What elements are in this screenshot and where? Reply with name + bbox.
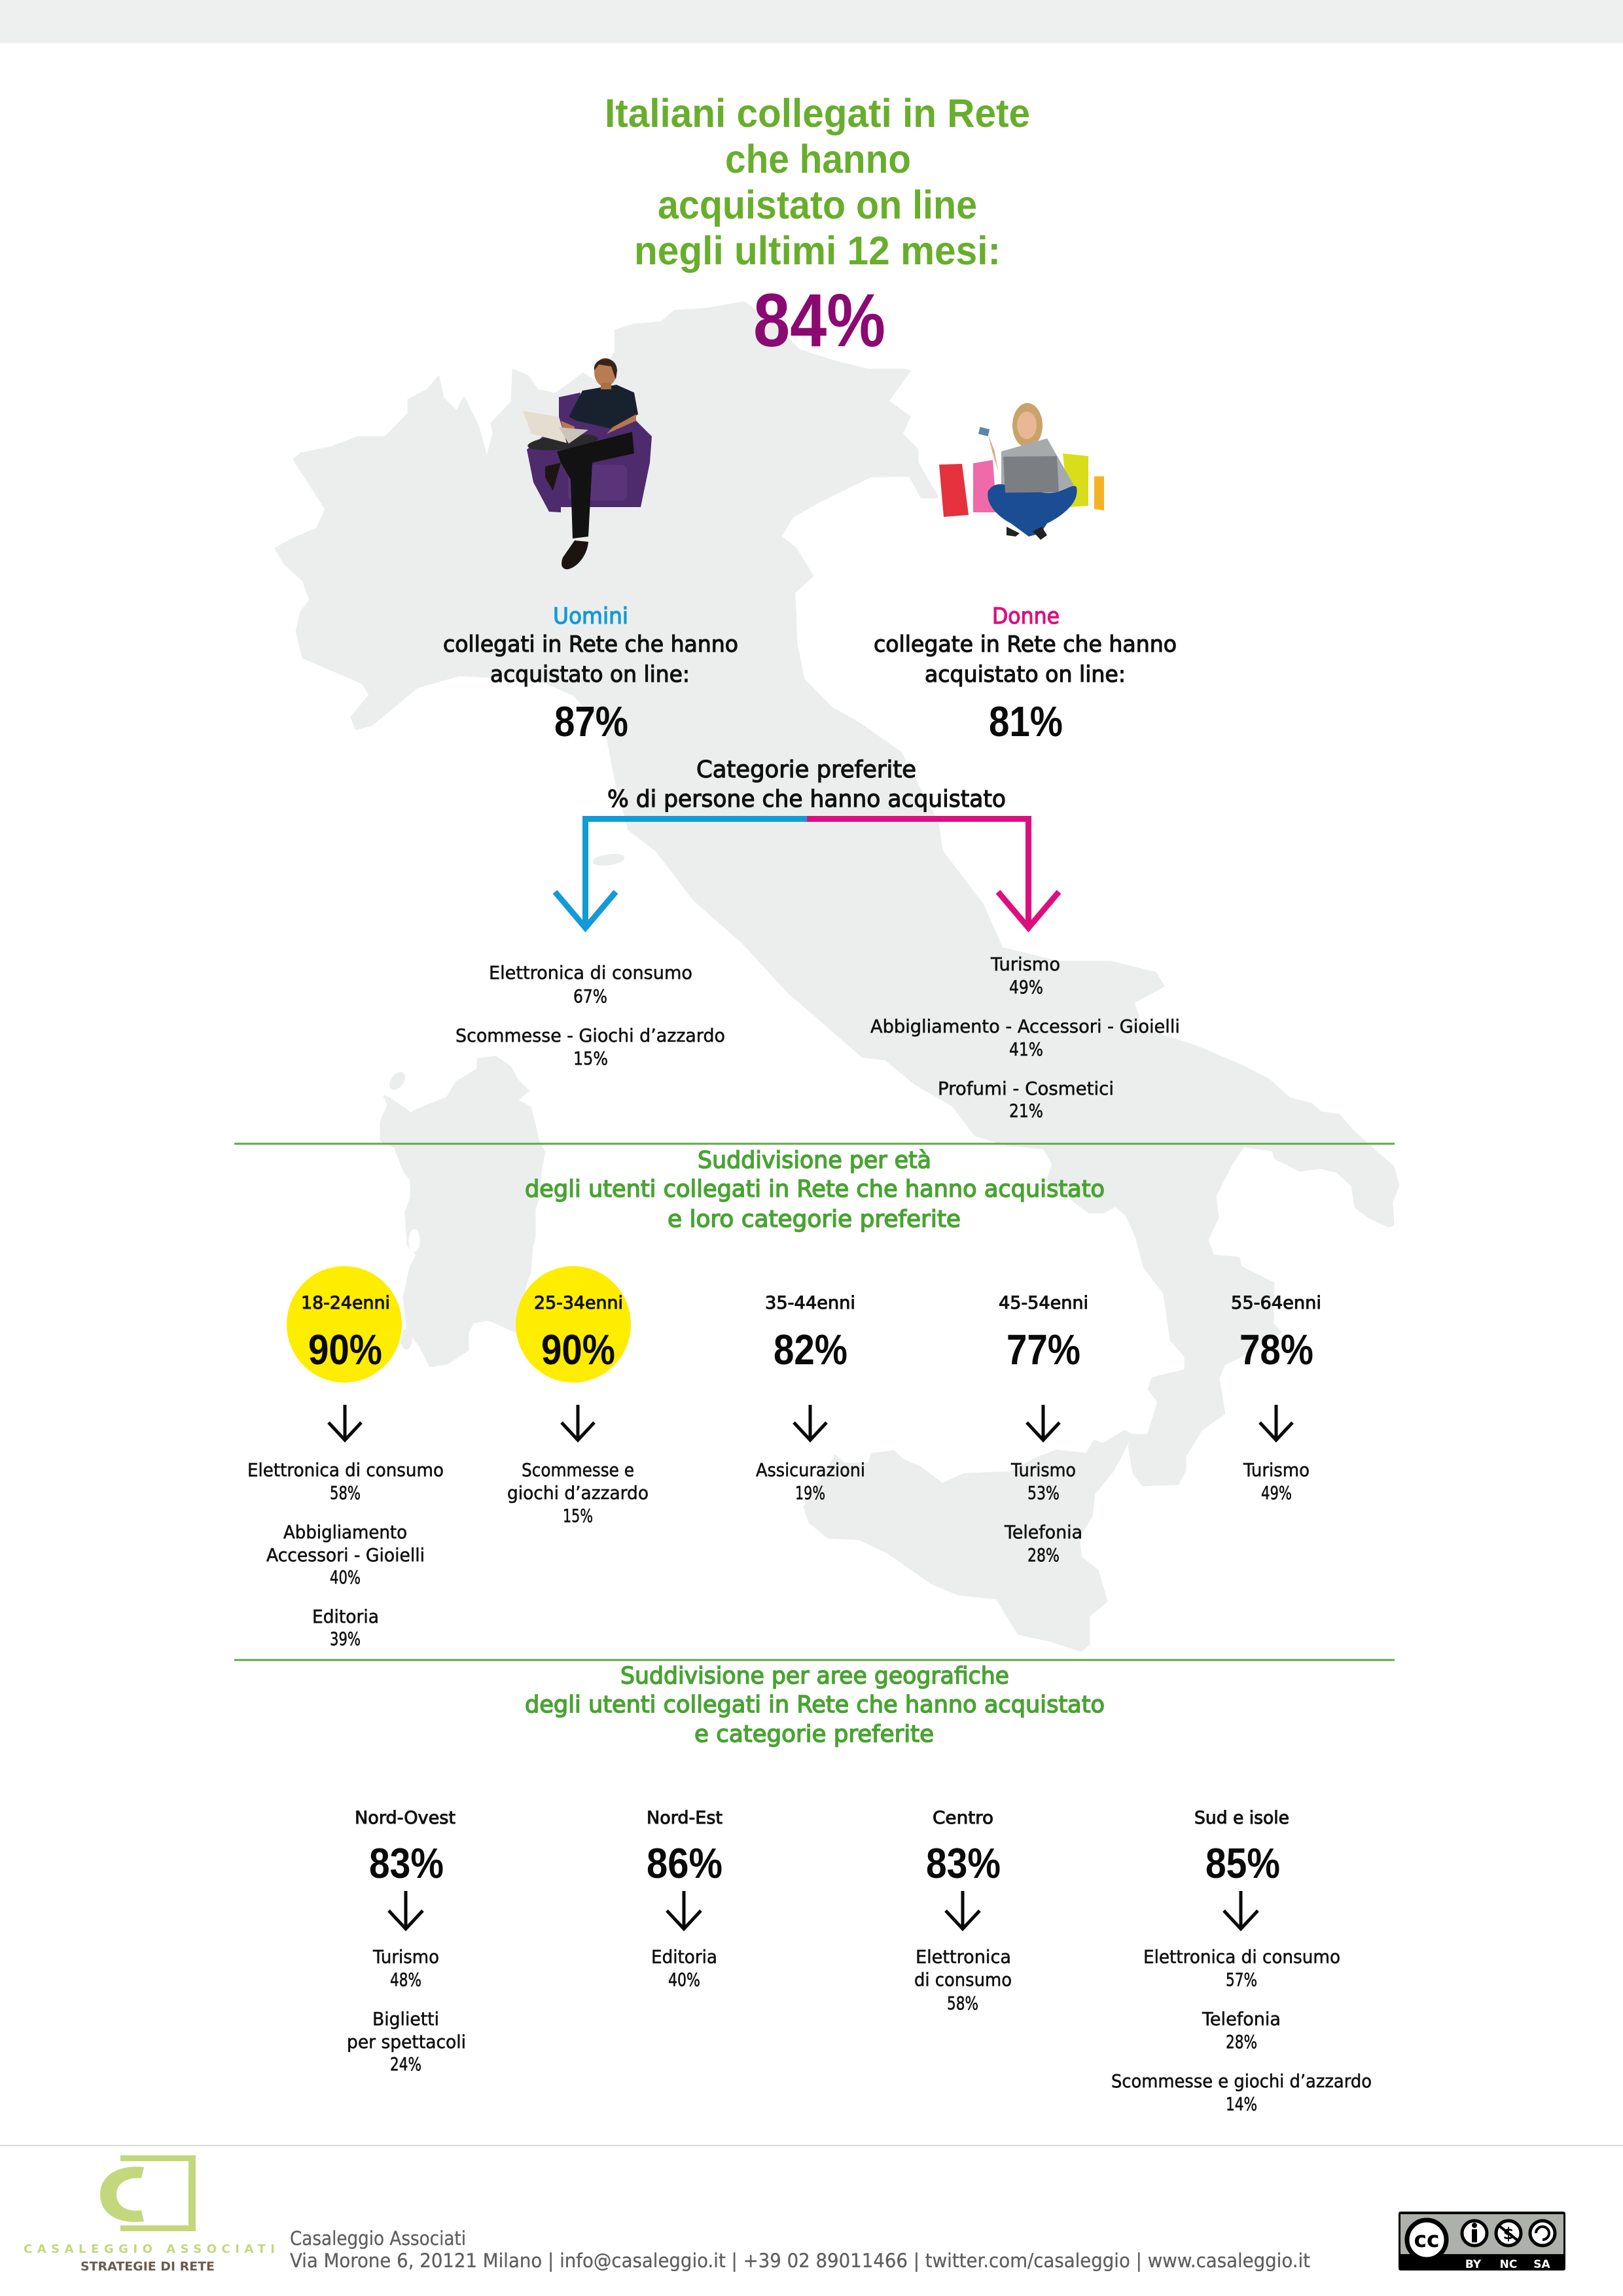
age column 35-44: 35-44enni [765,1293,855,1313]
region column Centro: 58% [947,1992,978,2014]
age column 55-64: 55-64enni [1231,1293,1321,1313]
footer contact text: Via Morone 6, 20121 Milano | info@casaleggio.it | +39 02 89011466 | twitter.com/casaleggio | www.casaleggio.it [290,2250,1310,2272]
women block: Donne [992,603,1060,629]
logo: Casaleggio Associati: STRATEGIE DI RETE [80,2259,215,2274]
age column 45-54: 45-54enni [999,1293,1088,1313]
age column 18-24: 40% [330,1566,361,1588]
region column Nord-Ovest [347,1808,466,2075]
region column Sud e isole: Elettronica di consumo [1143,1946,1340,1968]
region column Nord-Ovest: per spettacoli [347,2031,466,2053]
region column Centro: Centro [933,1808,993,1828]
men categories: 15% [573,1048,608,1069]
highlight circle 18-24 [287,1266,402,1383]
title: negli ultimi 12 mesi: [634,228,1001,273]
region column Centro: 83% [926,1839,1001,1887]
region column Centro: Elettronica [916,1946,1011,1968]
arrow: magenta [807,819,1059,928]
Creative Commons badge: BY [1465,2258,1482,2271]
age column 18-24 [247,1293,444,1650]
age column 18-24: Abbigliamento [283,1521,407,1543]
age column 45-54: Turismo [1010,1459,1076,1481]
favourite categories heading: % di persone che hanno acquistato [607,786,1006,813]
age column 45-54: 77% [1007,1326,1080,1373]
women categories: 21% [1009,1100,1043,1122]
age column 45-54: 53% [1027,1482,1060,1504]
region column Nord-Est: Nord-Est [647,1808,722,1828]
women categories: Turismo [990,953,1060,975]
women categories: Abbigliamento - Accessori - Gioielli [870,1016,1180,1037]
age column 45-54: Telefonia [1004,1521,1082,1543]
region column Nord-Ovest: Nord-Ovest [355,1808,455,1828]
women block [874,603,1177,745]
title: acquistato on line [658,183,977,227]
age column 35-44: Assicurazioni [756,1459,865,1481]
illustration: man with laptop in armchair [523,358,652,569]
age column 55-64 [1231,1293,1321,1504]
women categories [870,953,1180,1122]
women categories: Profumi - Cosmetici [938,1078,1114,1099]
top band [0,0,1623,43]
region column Sud e isole: 28% [1226,2031,1257,2053]
men categories: 67% [573,985,607,1007]
age column 18-24: Editoria [312,1606,379,1627]
men block: Uomini [553,603,628,629]
women categories: 49% [1009,976,1043,998]
men categories: Scommesse - Giochi d’azzardo [455,1025,725,1046]
region column Nord-Ovest: Turismo [372,1946,439,1968]
women block: collegate in Rete che hanno [874,631,1177,658]
highlight circle 25-34 [516,1266,631,1383]
men block: collegati in Rete che hanno [443,631,738,658]
region column Nord-Est: 86% [647,1839,722,1887]
women block: 81% [989,698,1063,745]
title: Italiani collegati in Rete [605,91,1030,135]
age column 45-54 [999,1293,1088,1566]
age column 18-24: 58% [330,1482,361,1504]
age column 18-24: 39% [330,1628,361,1650]
region column Centro [914,1808,1012,2014]
Creative Commons badge: SA [1533,2258,1551,2271]
age column 25-34: 15% [563,1505,593,1527]
arrow: blue [555,819,807,928]
age column 25-34: 25-34enni [534,1293,623,1313]
age section heading [525,1147,1105,1233]
age column 35-44: 19% [795,1482,825,1504]
region column Nord-Ovest: 83% [369,1839,444,1887]
background map of Italy [276,302,1399,1651]
footer contact text: Casaleggio Associati [290,2227,466,2250]
title [605,91,1030,273]
geographic section heading: e categorie preferite [694,1721,934,1748]
region column Nord-Est: Editoria [651,1946,717,1968]
region column Centro: di consumo [914,1969,1012,1990]
women block: acquistato on line: [925,662,1126,688]
age section heading: Suddivisione per età [698,1147,931,1174]
age column 18-24: Elettronica di consumo [247,1459,444,1481]
region column Sud e isole: Sud e isole [1194,1808,1289,1828]
men block [443,603,738,745]
men block: acquistato on line: [490,662,690,688]
women categories: 41% [1009,1038,1043,1060]
age column 55-64: 78% [1240,1326,1313,1373]
age column 18-24: 90% [308,1326,382,1373]
favourite categories heading: Categorie preferite [696,756,916,783]
region column Nord-Ovest: 24% [390,2053,421,2075]
age column 18-24: 18-24enni [301,1293,390,1313]
illustration: woman with laptop and shopping bags [939,403,1104,540]
men block: 87% [554,698,628,745]
age column 55-64: Turismo [1243,1459,1310,1481]
age column 35-44: 82% [774,1326,847,1373]
logo: Casaleggio Associati [24,2155,275,2274]
geographic section heading [525,1663,1105,1748]
footer contact text [290,2227,1310,2272]
age column 55-64: 49% [1261,1482,1292,1504]
favourite categories heading [607,756,1006,813]
Creative Commons badge [1399,2212,1565,2271]
age column 35-44 [756,1293,865,1504]
region column Nord-Ovest: 48% [390,1969,421,1990]
Creative Commons badge: cc [1414,2227,1440,2252]
age column 45-54: 28% [1027,1544,1060,1566]
age section heading: degli utenti collegati in Rete che hanno acquistato [525,1176,1105,1203]
age column 18-24: Accessori - Gioielli [266,1544,425,1566]
age column 25-34: giochi d’azzardo [507,1482,649,1504]
region column Nord-Ovest: Biglietti [372,2008,439,2030]
logo: Casaleggio Associati: CASALEGGIO ASSOCIATI [24,2242,275,2256]
Creative Commons badge: NC [1500,2258,1517,2271]
region column Sud e isole: Scommesse e giochi d’azzardo [1111,2070,1372,2092]
title: che hanno [725,137,911,181]
region column Nord-Est: 40% [668,1969,700,1990]
geographic section heading: degli utenti collegati in Rete che hanno acquistato [525,1691,1105,1718]
age column 25-34: Scommesse e [522,1459,634,1481]
headline percentage: 84% [753,279,885,362]
Creative Commons badge: $ [1503,2225,1514,2243]
region column Sud e isole: Telefonia [1202,2008,1281,2030]
age column 25-34: 90% [541,1326,615,1373]
region column Nord-Est [647,1808,722,1990]
men categories: Elettronica di consumo [489,962,692,983]
men categories [455,962,725,1069]
region column Sud e isole [1111,1808,1372,2115]
region column Sud e isole: 57% [1226,1969,1257,1990]
region column Sud e isole: 85% [1205,1839,1280,1887]
geographic section heading: Suddivisione per aree geografiche [620,1663,1009,1689]
age section heading: e loro categorie preferite [668,1206,961,1233]
region column Sud e isole: 14% [1226,2093,1257,2115]
age column 25-34 [507,1293,649,1527]
